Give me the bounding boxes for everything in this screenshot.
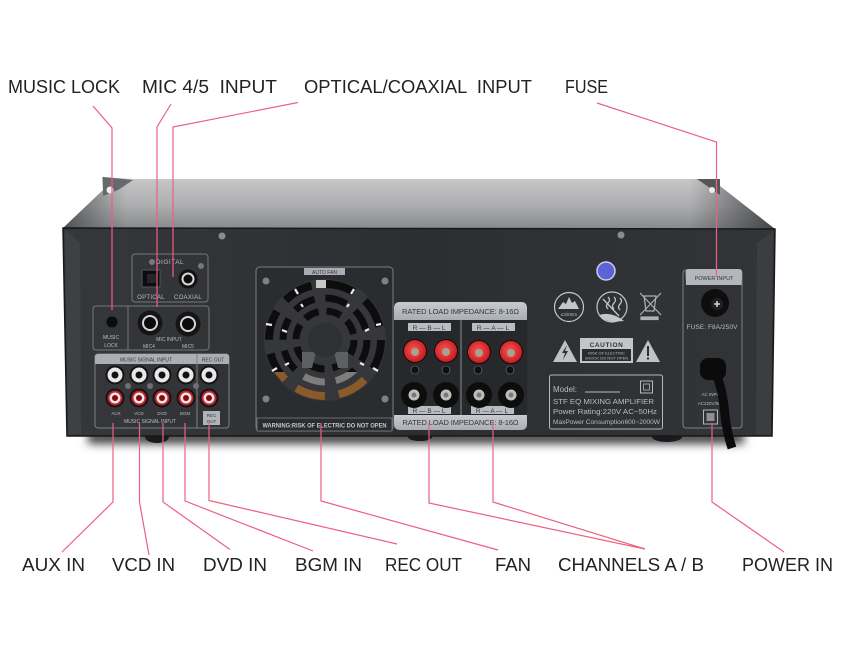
- panel: model plate: Model:: [553, 385, 577, 394]
- icon: fan grille: [264, 279, 386, 401]
- panel: music signal input: VCD: [134, 411, 144, 416]
- panel: speaker terminals: R — A — L: [476, 408, 508, 415]
- panel: speaker terminals: [394, 302, 527, 430]
- panel: speaker terminals: R — A — L: [477, 325, 509, 332]
- panel: digital input: DIGITAL: [156, 259, 184, 266]
- panel: model plate: Power Rating:220V AC~50Hz: [553, 407, 657, 416]
- icon: red RCA row: [106, 388, 218, 408]
- panel: music lock and mic input: LOCK: [104, 343, 118, 349]
- icon: mic jack 4: [138, 310, 162, 336]
- panel: power input: FUSE: F8A/250V: [686, 324, 738, 331]
- icon: red binding posts: [403, 339, 523, 364]
- icon: recycle bin crossed: [640, 293, 661, 320]
- panel: digital input: [132, 254, 208, 302]
- icon: climate symbol: [597, 292, 627, 322]
- panel: music lock and mic input: MIC INPUT: [156, 337, 182, 343]
- icon: coaxial jack: [178, 270, 198, 288]
- icon: altitude symbol: ≤2000m: [561, 312, 577, 317]
- panel: speaker terminals: R — B — L: [413, 408, 446, 415]
- bottom labels: BGM IN: [295, 554, 362, 575]
- caution block: CAUTION: [590, 342, 623, 349]
- screws: [218, 231, 625, 240]
- panel: music signal input: OUT: [207, 419, 216, 424]
- panel: power input: AC220V/50Hz: [698, 401, 727, 406]
- icon: white RCA row: [106, 366, 218, 384]
- panel: fan: WARNING:RISK OF ELECTRIC DO NOT OPEN: [262, 422, 387, 430]
- floor shadow: [88, 431, 744, 444]
- panel: model plate: STF EQ MIXING AMPLIFIER: [553, 397, 655, 406]
- panel: speaker terminals: RATED LOAD IMPEDANCE: 8-16Ω: [402, 418, 519, 427]
- top labels: OPTICAL/COAXIAL INPUT: [304, 76, 532, 97]
- panel: music signal input: DVD: [157, 411, 167, 416]
- panel: music lock and mic input: MUSIC: [103, 335, 119, 341]
- top cover: [63, 177, 775, 229]
- panel: music lock and mic input: [93, 306, 209, 350]
- panel: music signal input: [95, 354, 229, 428]
- panel: fan: [256, 267, 393, 431]
- caution block: SHOCK DO NOT OPEN: [585, 356, 628, 360]
- panel: music signal input: MUSIC SIGNAL INPUT: [124, 419, 176, 425]
- top labels: [8, 76, 608, 97]
- top labels: MUSIC LOCK: [8, 76, 121, 97]
- panel: music lock and mic input: MIC4: [143, 344, 155, 350]
- bottom labels: CHANNELS A / B: [558, 554, 704, 575]
- rear face: [63, 228, 775, 436]
- leader lines: [62, 102, 784, 555]
- bottom labels: REC OUT: [385, 554, 462, 575]
- bottom labels: [22, 554, 833, 575]
- icon: power cord: [700, 358, 732, 448]
- panel: power input: [683, 269, 742, 448]
- icon: electric warning triangle: [553, 340, 577, 362]
- icon: black binding posts: [401, 382, 524, 408]
- panel: music lock and mic input: MIC5: [182, 344, 194, 350]
- bottom labels: POWER IN: [742, 554, 833, 575]
- panel: digital input: OPTICAL: [137, 295, 165, 301]
- bottom labels: VCD IN: [112, 554, 175, 575]
- panel: model plate: MaxPower Consumption600~2000W: [553, 419, 661, 426]
- panel: power input: POWER INPUT: [695, 276, 734, 282]
- caution block: [553, 338, 660, 363]
- panel: speaker terminals: RATED LOAD IMPEDANCE: 8-16Ω: [402, 307, 519, 316]
- panel: speaker terminals: R — B — L: [413, 325, 446, 332]
- icon: mic jack 5: [176, 312, 200, 336]
- top labels: FUSE: [565, 76, 608, 97]
- panel: music signal input: AUX: [111, 411, 121, 416]
- panel: model plate: [550, 375, 662, 429]
- side bevels: [65, 230, 773, 435]
- panel: power input: AC INPUT: [701, 392, 723, 397]
- panel: fan: AUTO FAN: [312, 270, 337, 276]
- top labels: MIC 4/5 INPUT: [142, 76, 277, 97]
- panel: music signal input: REC OUT: [202, 358, 224, 364]
- bottom labels: FAN: [495, 554, 531, 575]
- icon: altitude symbol: [554, 292, 584, 322]
- icon: blue sticker: [597, 262, 615, 280]
- panel: music signal input: MUSIC SIGNAL INPUT: [120, 358, 172, 364]
- panel: digital input: COAXIAL: [174, 295, 202, 301]
- bottom labels: AUX IN: [22, 554, 85, 575]
- icon: exclamation triangle: [636, 340, 660, 362]
- icon: fuse cap: [701, 289, 729, 317]
- amplifier unit: [63, 177, 775, 448]
- feet: [145, 431, 682, 443]
- caution block: RISK OF ELECTRIC: [588, 350, 625, 356]
- panel: music signal input: BGM: [180, 411, 190, 416]
- icon: optical port: [142, 270, 160, 287]
- panel: music signal input: REC: [207, 413, 217, 418]
- bottom labels: DVD IN: [203, 554, 267, 575]
